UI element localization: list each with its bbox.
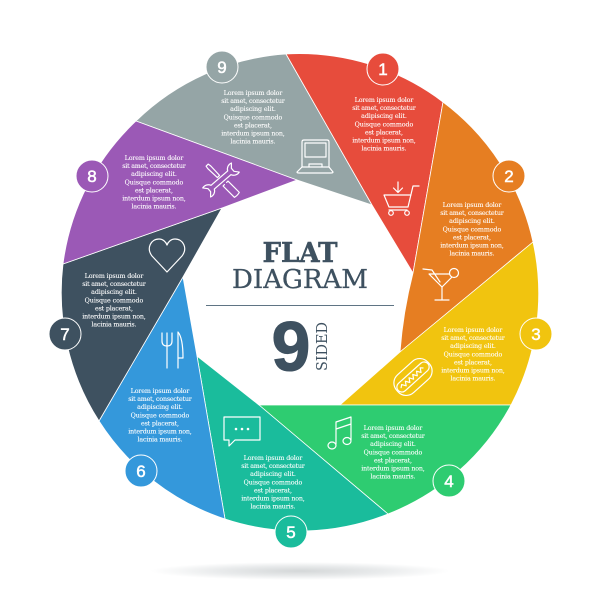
badge 6 (125, 455, 157, 487)
text block 1: adipiscing elit. (361, 113, 407, 120)
icon: laptop (297, 140, 333, 173)
badge 8: 8 (87, 167, 97, 186)
badge 7 (49, 318, 81, 350)
panel: segment 5 teal (197, 356, 388, 531)
text block 5: lacinia mauris. (250, 504, 296, 511)
title: DIAGRAM: DIAGRAM (232, 265, 368, 295)
badge 9 (206, 51, 238, 83)
text block 1: interdum ipsum non, (352, 138, 416, 144)
panel: segment 3 yellow (340, 242, 539, 405)
icon: music notes (328, 417, 351, 449)
text block 8: Quisque commodo (125, 179, 184, 186)
icon: speech bubble (224, 417, 260, 446)
badge 3: 3 (531, 325, 541, 344)
text block 6: adipiscing elit. (137, 404, 183, 411)
text block 6: sit amet, consectetur (128, 396, 193, 403)
text block 1: lacinia mauris. (362, 146, 406, 153)
badge 1: 1 (378, 60, 388, 79)
text block 9: interdum ipsum non, (221, 130, 285, 138)
text block 9: adipiscing elit. (230, 106, 276, 113)
text block 9: sit amet, consectetur (221, 98, 286, 105)
text block 9: lacinia mauris. (230, 139, 276, 146)
divider line (206, 305, 394, 306)
text block 2: est placerat, (453, 234, 491, 241)
text block 3: lacinia mauris. (450, 376, 496, 383)
text block 7: Quisque commodo (85, 297, 144, 304)
badge 6: 6 (136, 462, 146, 481)
text block 6: interdum ipsum non, (128, 428, 192, 436)
badge 9: 9 (217, 58, 227, 77)
text block 2: lacinia mauris. (450, 251, 494, 258)
text block 2: interdum ipsum non, (440, 242, 504, 250)
ground shadow (150, 562, 450, 580)
badge 3 (520, 318, 552, 350)
text block 6: Quisque commodo (131, 412, 190, 419)
text block 2: Quisque commodo (443, 226, 502, 233)
text block 7: est placerat, (95, 305, 133, 312)
icon: fork and knife (162, 332, 183, 368)
text block 9: Quisque commodo (224, 114, 283, 121)
text block 8: lacinia mauris. (132, 204, 176, 211)
text block 5: est placerat, (254, 487, 292, 494)
text block 3: est placerat, (454, 359, 492, 366)
badge 4 (433, 465, 465, 497)
SIDED label: SIDED (313, 322, 331, 371)
text block 6: Lorem ipsum dolor (131, 388, 190, 395)
text block 4: adipiscing elit. (370, 441, 416, 448)
text block 5: adipiscing elit. (250, 471, 296, 478)
panel: segment 4 green (259, 405, 511, 514)
text block 4: est placerat, (374, 457, 412, 464)
text block 5: interdum ipsum non, (241, 496, 305, 502)
panel: segment 1 red (286, 54, 443, 273)
text block 6: lacinia mauris. (138, 437, 182, 444)
text block 4: lacinia mauris. (370, 474, 416, 481)
text block 1: Quisque commodo (355, 121, 414, 128)
big number 9: 9 (272, 308, 310, 386)
text block 1: Lorem ipsum dolor (355, 97, 414, 104)
text block 2: adipiscing elit. (449, 218, 495, 225)
text block 7: sit amet, consectetur (82, 281, 147, 288)
badge 5 (275, 516, 307, 548)
text block 6: est placerat, (141, 420, 179, 427)
badge 1 (367, 53, 399, 85)
text block 8: sit amet, consectetur (122, 163, 187, 170)
badge 2 (493, 160, 525, 192)
text block 5: Lorem ipsum dolor (244, 455, 303, 462)
text block 3: Quisque commodo (444, 351, 503, 358)
text block 9: Lorem ipsum dolor (224, 90, 283, 97)
panel: segment 6 blue (99, 277, 225, 519)
text block 5: sit amet, consectetur (241, 463, 306, 470)
badge 7: 7 (60, 325, 70, 344)
badge 4: 4 (444, 472, 454, 491)
text block 3: interdum ipsum non, (441, 368, 505, 374)
badge 8 (76, 160, 108, 192)
text block 1: est placerat, (365, 129, 403, 136)
icon: shopping cart (384, 182, 419, 215)
badge 5: 5 (286, 523, 296, 542)
panel: segment 2 orange (400, 102, 533, 352)
panel: segment 7 dark slate (61, 208, 222, 421)
panel: segment 9 grey (136, 54, 372, 205)
text block 9: est placerat, (234, 122, 272, 129)
text block 3: adipiscing elit. (450, 343, 496, 350)
panel: segment 8 purple (63, 121, 297, 264)
text block 2: Lorem ipsum dolor (443, 202, 502, 209)
text block 1: sit amet, consectetur (352, 105, 417, 112)
text block 3: sit amet, consectetur (441, 335, 506, 342)
text block 4: Lorem ipsum dolor (364, 425, 423, 432)
text block 8: Lorem ipsum dolor (125, 155, 184, 162)
icon: hot dog (389, 354, 437, 400)
text block 4: Quisque commodo (364, 449, 423, 456)
text block 8: est placerat, (135, 187, 173, 194)
text block 8: interdum ipsum non, (122, 196, 186, 202)
text block 3: Lorem ipsum dolor (444, 327, 503, 334)
text block 5: Quisque commodo (244, 479, 303, 486)
text block 7: adipiscing elit. (91, 289, 137, 296)
text block 4: sit amet, consectetur (361, 433, 426, 440)
text block 7: Lorem ipsum dolor (85, 273, 144, 280)
text block 4: interdum ipsum non, (361, 466, 425, 472)
text block 7: lacinia mauris. (92, 322, 136, 329)
badge 2: 2 (504, 167, 514, 186)
icon: cocktail (423, 268, 458, 300)
text block 7: interdum ipsum non, (82, 314, 146, 320)
icon: tools (203, 163, 240, 198)
text block 8: adipiscing elit. (131, 171, 177, 178)
text block 2: sit amet, consectetur (440, 210, 505, 217)
icon: heart (149, 239, 185, 272)
title: FLAT: FLAT (262, 238, 338, 269)
